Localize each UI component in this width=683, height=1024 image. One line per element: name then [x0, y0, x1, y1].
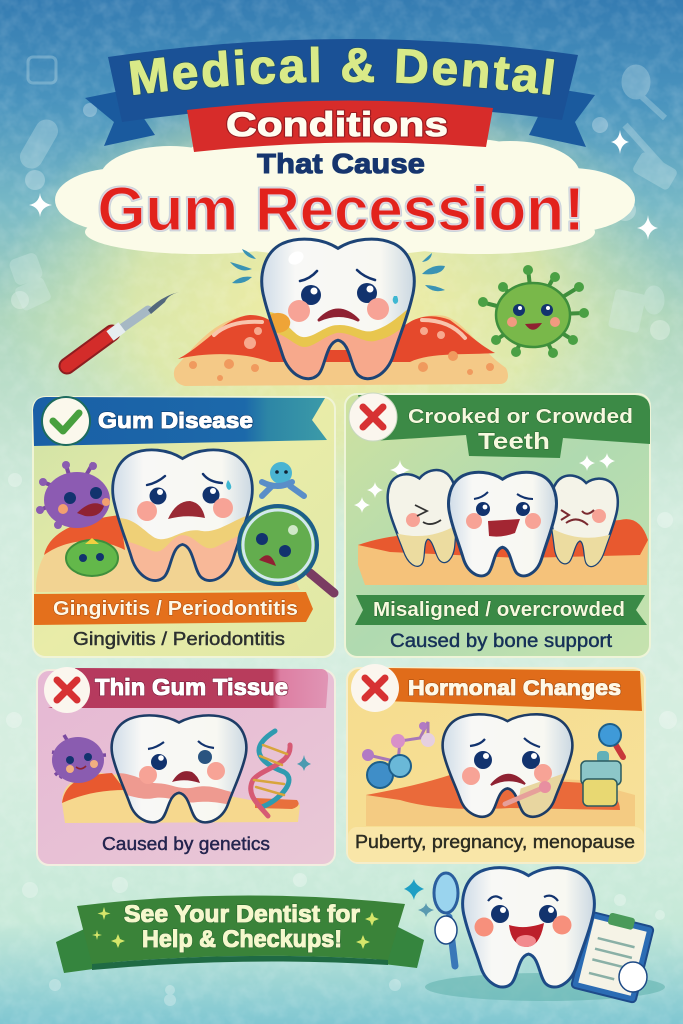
hero tooth [261, 239, 415, 391]
footer text [124, 901, 360, 953]
crooked teeth caption: Caused by bone support [390, 631, 613, 652]
hormonal caption: Puberty, pregnancy, menopause [355, 831, 635, 852]
cross badge [349, 393, 397, 441]
mascot face [474, 896, 572, 947]
panel: hormonal changes [347, 664, 645, 863]
heading line 2: Conditions [226, 106, 448, 144]
footer ribbon [77, 895, 405, 964]
title banner [85, 39, 595, 152]
center tooth [449, 472, 556, 576]
thin gum ribbon [48, 668, 328, 708]
hero tooth face [288, 270, 398, 322]
gum [358, 519, 648, 585]
orange ribbon [34, 592, 313, 625]
sparkles [29, 130, 658, 240]
gum [36, 518, 300, 592]
purple germ [36, 461, 110, 529]
gum strip [366, 775, 635, 826]
hormonal title: Hormonal Changes [408, 676, 621, 700]
dental scraper [67, 292, 179, 366]
red ribbon [187, 100, 493, 152]
worry drops [230, 249, 445, 291]
mascot shadow [425, 973, 665, 1001]
small green germ [66, 538, 118, 576]
gum disease title: Gum Disease [98, 408, 253, 433]
blue magnifier [599, 724, 623, 757]
crooked teeth ribbon [358, 395, 650, 458]
right tooth [552, 474, 620, 568]
hero gum [174, 315, 508, 386]
panel: gum disease [33, 397, 335, 657]
crooked teeth title: Crooked or Crowded [408, 405, 633, 428]
cloud behind headline [55, 136, 635, 256]
cross badge [44, 667, 90, 713]
gum disease caption: Gingivitis / Periodontitis [73, 629, 285, 649]
panel: thin gum tissue [37, 667, 335, 865]
hormonal tooth [443, 714, 573, 826]
heading: That Cause: That Cause [257, 148, 425, 179]
thin gum tooth [111, 715, 247, 822]
gum disease ribbon [33, 397, 327, 446]
panel: crooked teeth [345, 393, 650, 657]
clipboard [571, 907, 655, 1003]
sparkles near mirror [404, 879, 434, 917]
footer text: See Your Dentist for [124, 901, 360, 928]
green germ [478, 265, 589, 358]
green ribbon text: Misaligned / overcrowded [373, 598, 625, 621]
magnifier [239, 506, 334, 593]
gum disease tooth [112, 450, 253, 592]
mascot body [463, 868, 594, 987]
blue ribbon tails [85, 88, 595, 147]
orange ribbon text: Gingivitis / Periodontitis [53, 598, 298, 620]
sparkle [297, 755, 311, 771]
mascot: happy tooth [434, 868, 655, 1003]
crooked teeth title: Teeth [478, 428, 550, 454]
molecule [362, 722, 435, 788]
thin gum title: Thin Gum Tissue [95, 674, 288, 700]
mirror [434, 873, 458, 966]
star accents [92, 907, 379, 949]
hands [435, 916, 647, 992]
hormonal ribbon [360, 668, 642, 711]
dna helix [251, 731, 290, 816]
heading line 1: Medical & Dental [129, 46, 555, 96]
gum [62, 773, 300, 823]
purple germ [52, 735, 106, 783]
footer text: Help & Checkups! [142, 926, 342, 953]
footer tails [56, 923, 424, 973]
check badge [42, 397, 90, 445]
bottle [581, 751, 621, 806]
sparkles [354, 453, 615, 513]
heading: Gum Recession: Gum Recession! [98, 175, 584, 243]
blue creature [262, 462, 304, 496]
thin gum caption: Caused by genetics [102, 833, 270, 854]
blue main ribbon [108, 39, 578, 122]
green ribbon [355, 595, 647, 625]
left tooth [386, 468, 456, 567]
faint background icons [8, 57, 678, 333]
crooked teeth title [408, 405, 633, 454]
cross badge [351, 664, 399, 712]
footer banner [56, 895, 424, 973]
